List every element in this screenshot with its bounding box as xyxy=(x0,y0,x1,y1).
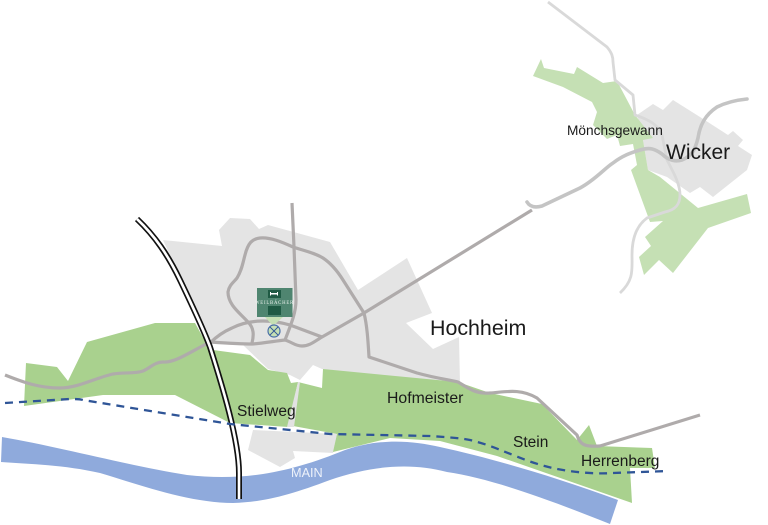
label: Herrenberg: Herrenberg xyxy=(581,453,659,470)
label: Mönchsgewann: Mönchsgewann xyxy=(567,123,663,138)
area: Hochheim town xyxy=(163,218,460,384)
icon: location marker xyxy=(268,325,280,337)
label: river name: MAIN xyxy=(291,466,323,480)
river: Main xyxy=(1,437,618,524)
icon: logo label xyxy=(268,306,281,315)
area: Wicker town xyxy=(637,100,752,197)
label: Stein: Stein xyxy=(513,434,548,451)
railway xyxy=(137,219,239,499)
road: Wicker through road xyxy=(527,99,747,207)
vineyard: Stielweg xyxy=(24,323,298,427)
icon: logo emblem xyxy=(268,290,281,298)
label: Wicker: Wicker xyxy=(666,141,730,164)
road: Hochheim ring and crossings xyxy=(5,203,700,446)
label: Hochheim: Hochheim xyxy=(430,316,526,340)
logo: Weilbächer xyxy=(255,288,294,317)
area: southern Hochheim district xyxy=(248,430,337,467)
marker: pointer wedge xyxy=(265,317,283,326)
label: Hofmeister: Hofmeister xyxy=(387,390,463,407)
vineyard: Mönchsgewann xyxy=(533,59,751,275)
road: light road to Wicker xyxy=(548,2,680,293)
road: Hochheim to Wicker xyxy=(364,210,532,313)
label: Stielweg: Stielweg xyxy=(237,403,296,420)
logo: Weilbächer: WEILBÄCHER xyxy=(255,300,294,306)
boundary: dashed blue line xyxy=(5,399,668,473)
vineyard: Hofmeister, Stein, Herrenberg xyxy=(293,369,655,503)
road: light path between vineyards xyxy=(287,382,300,427)
